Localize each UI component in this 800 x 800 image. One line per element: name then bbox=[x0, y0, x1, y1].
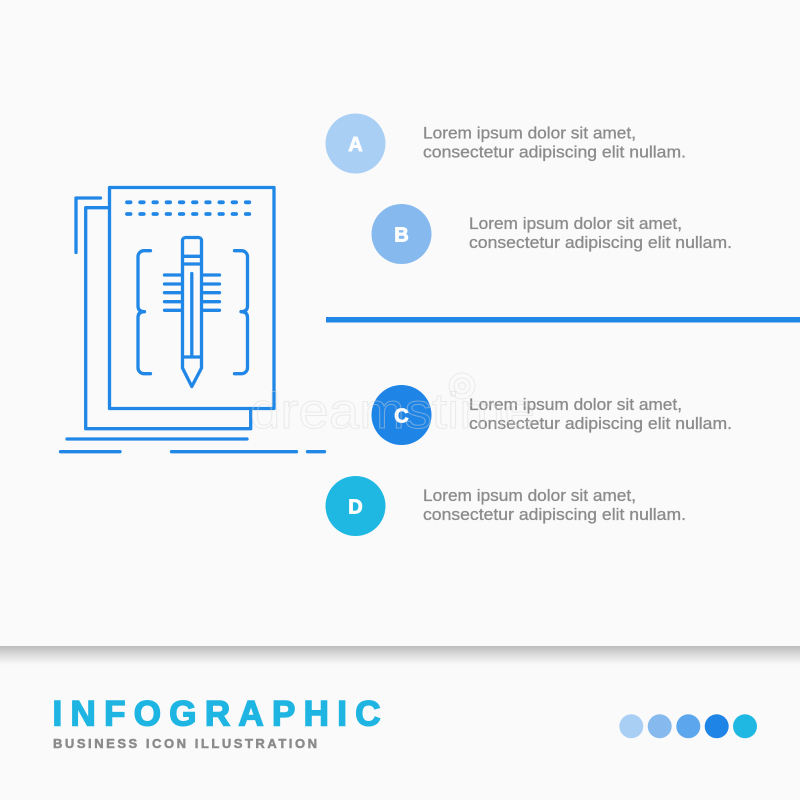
document back page bbox=[86, 208, 251, 429]
item B: B bbox=[394, 224, 409, 246]
text D: Lorem ipsum dolor sit amet, bbox=[423, 486, 636, 505]
pencil bands bbox=[183, 256, 201, 357]
dotted text rows bbox=[127, 202, 249, 214]
badge B bbox=[372, 204, 432, 264]
ground lines bbox=[60, 439, 324, 452]
text C bbox=[469, 395, 732, 433]
item D bbox=[326, 476, 686, 536]
item C bbox=[372, 385, 732, 445]
footer subtitle: BUSINESS ICON ILLUSTRATION bbox=[53, 736, 317, 751]
badge C bbox=[372, 385, 432, 445]
pencil bbox=[182, 238, 202, 386]
item C: C bbox=[394, 406, 409, 428]
text A bbox=[423, 124, 686, 162]
badge A bbox=[326, 114, 386, 174]
text A: Lorem ipsum dolor sit amet, bbox=[423, 124, 636, 142]
text C: Lorem ipsum dolor sit amet, bbox=[469, 395, 682, 414]
divider line bbox=[326, 317, 800, 322]
footer shadow band bbox=[0, 646, 800, 665]
text B bbox=[469, 214, 732, 252]
text D: consectetur adipiscing elit nullam. bbox=[423, 505, 686, 524]
document front page bbox=[110, 188, 274, 408]
palette dots bbox=[619, 714, 757, 738]
text B: consectetur adipiscing elit nullam. bbox=[469, 233, 732, 252]
third page corner bbox=[76, 198, 100, 252]
item D: D bbox=[348, 496, 363, 518]
text C: consectetur adipiscing elit nullam. bbox=[469, 414, 732, 433]
icon: code document with pencil bbox=[60, 188, 324, 452]
item B bbox=[372, 204, 732, 264]
badge D bbox=[326, 476, 386, 536]
left curly bracket bbox=[138, 251, 150, 374]
text A: consectetur adipiscing elit nullam. bbox=[423, 142, 686, 162]
watermark: dreamstime bbox=[250, 383, 535, 439]
text B: Lorem ipsum dolor sit amet, bbox=[469, 214, 682, 233]
item A bbox=[326, 114, 686, 174]
chip pins bbox=[164, 275, 182, 310]
item A: A bbox=[348, 134, 363, 156]
right curly bracket bbox=[234, 251, 248, 374]
text D bbox=[423, 486, 686, 524]
footer title: INFOGRAPHIC bbox=[52, 694, 380, 734]
